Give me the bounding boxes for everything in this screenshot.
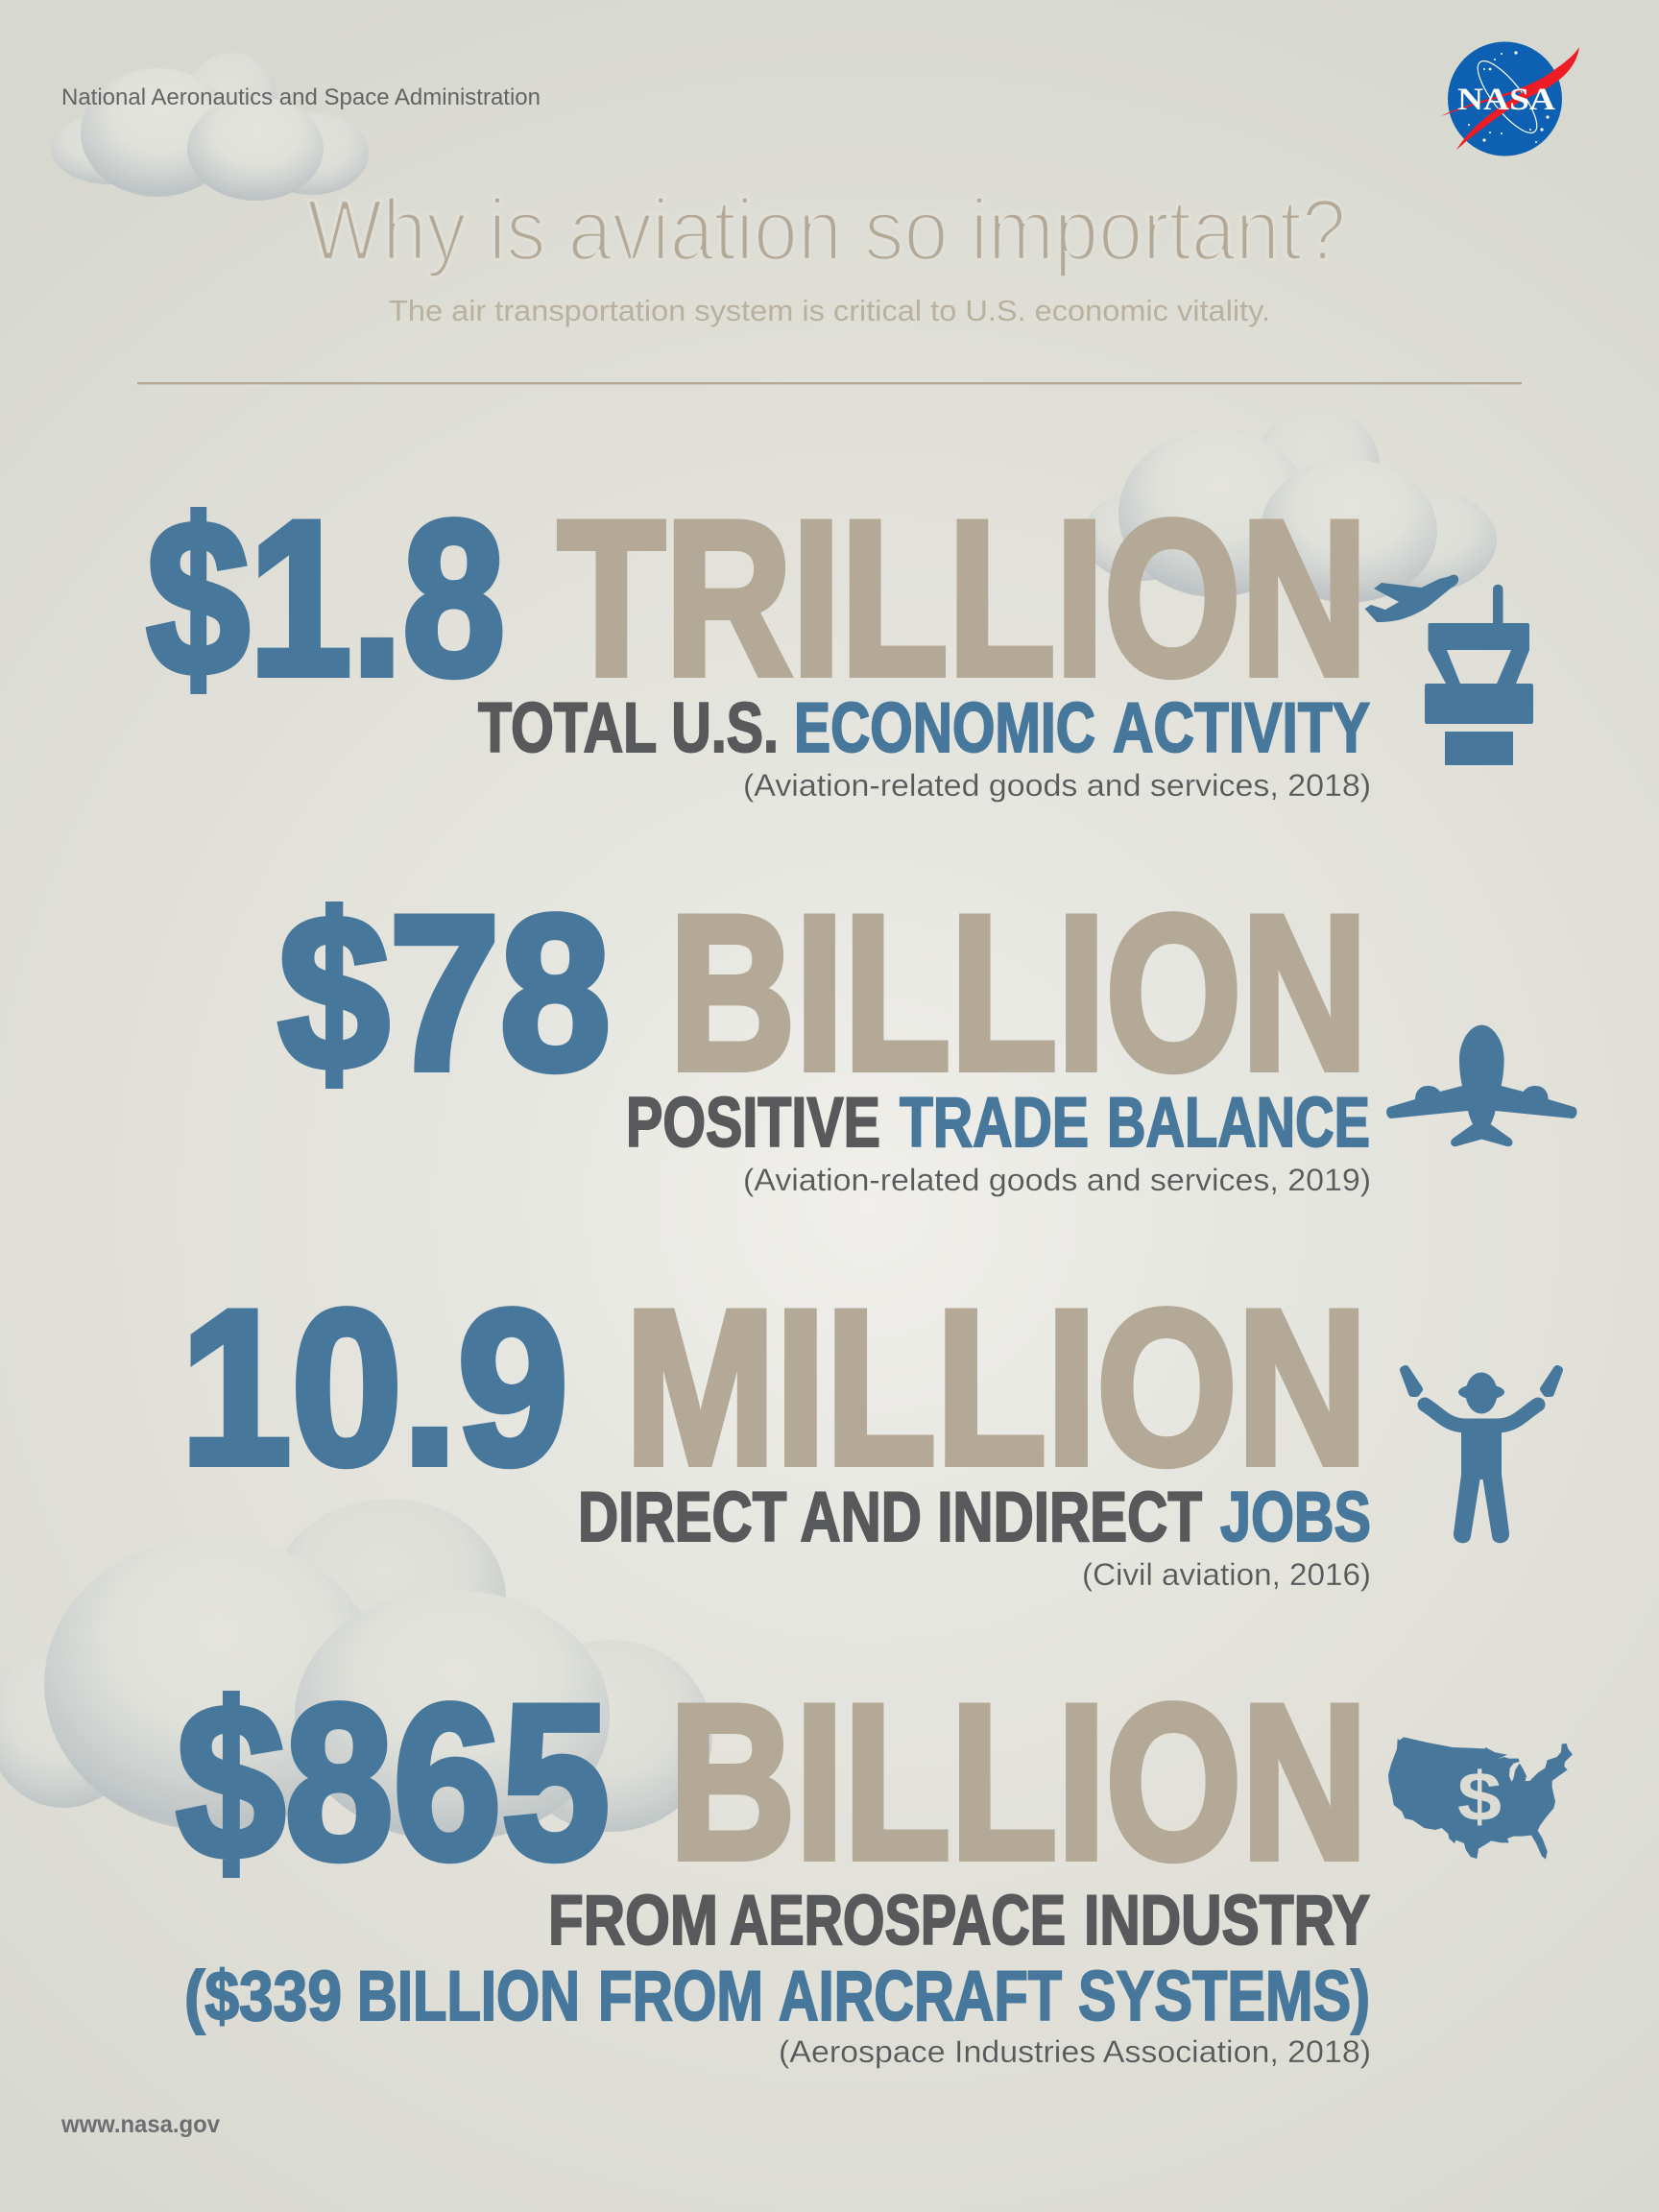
figure: 10.9 MILLION: MILLION	[625, 1264, 1367, 1510]
heading: total economic activity: TOTAL U.S.	[478, 689, 779, 767]
figure: $1.8 TRILLION: $1.8	[147, 475, 505, 721]
caption: (Civil aviation, 2016)	[1082, 1557, 1371, 1592]
heading: aircraft systems: BILLION	[357, 1958, 580, 2035]
heading: from aerospace industry: FROM	[548, 1882, 718, 1960]
heading: from aerospace industry	[548, 1882, 1370, 1960]
figure: $1.8 TRILLION	[147, 475, 1367, 721]
icon: marshaller figure	[1404, 1369, 1559, 1543]
heading: aircraft systems: SYSTEMS)	[1078, 1958, 1370, 2035]
figure: $865 BILLION	[177, 1659, 1367, 1905]
heading: aircraft systems: ($339	[184, 1958, 342, 2035]
icon: airplane	[1386, 1025, 1576, 1146]
figure: 10.9 MILLION: 10.9	[180, 1264, 568, 1510]
caption: (Aerospace Industries Association, 2018)	[779, 2034, 1371, 2069]
panel: aerospace industry	[177, 1659, 1573, 2069]
figure: $78 BILLION: BILLION	[669, 870, 1367, 1116]
heading: from aerospace industry: AEROSPACE	[730, 1882, 1066, 1960]
heading: positive trade balance: POSITIVE	[626, 1084, 880, 1162]
title: Why is aviation so important?	[307, 182, 1346, 278]
figure: $865 BILLION: $865	[177, 1659, 610, 1905]
figure: $78 BILLION: $78	[278, 870, 611, 1116]
caption: (Aviation-related goods and services, 2019)	[743, 1163, 1371, 1197]
heading: aircraft systems: AIRCRAFT	[779, 1958, 1062, 2035]
panel: jobs	[180, 1264, 1559, 1592]
icon: US map with dollar sign	[1388, 1737, 1573, 1860]
heading: total economic activity	[478, 689, 1370, 767]
website: www.nasa.gov	[60, 2111, 220, 2138]
panel: economic activity	[147, 475, 1533, 803]
caption: (Aviation-related goods and services, 2018)	[743, 768, 1371, 803]
agency name: National Aeronautics and Space Administration	[61, 84, 541, 110]
figure: $1.8 TRILLION: TRILLION	[558, 475, 1367, 721]
heading: direct and indirect jobs: JOBS	[1220, 1479, 1371, 1556]
heading: total economic activity: ACTIVITY	[1113, 689, 1370, 767]
panel: trade balance	[278, 870, 1576, 1197]
heading: aircraft systems	[184, 1958, 1370, 2035]
heading: aircraft systems: FROM	[598, 1958, 763, 2035]
figure: 10.9 MILLION	[180, 1264, 1367, 1510]
NASA logo	[1441, 42, 1579, 156]
cloud: lower left	[0, 1499, 712, 1841]
icon: control tower and plane	[1365, 575, 1533, 765]
cloud: top left	[51, 53, 369, 201]
heading: from aerospace industry: INDUSTRY	[1084, 1882, 1370, 1960]
heading: positive trade balance	[626, 1084, 1370, 1162]
heading: direct and indirect jobs: DIRECT AND INDIRECT	[578, 1479, 1202, 1556]
NASA logo: NASA	[1457, 83, 1555, 117]
heading: positive trade balance: BALANCE	[1107, 1084, 1370, 1162]
icon: US map with dollar sign: $	[1457, 1759, 1502, 1836]
heading: positive trade balance: TRADE	[900, 1084, 1089, 1162]
heading: total economic activity: ECONOMIC	[794, 689, 1095, 767]
figure: $865 BILLION: BILLION	[669, 1659, 1367, 1905]
figure: $78 BILLION	[278, 870, 1367, 1116]
subtitle: The air transportation system is critical to U.S. economic vitality.	[389, 295, 1270, 327]
cloud: upper right	[1083, 408, 1497, 603]
